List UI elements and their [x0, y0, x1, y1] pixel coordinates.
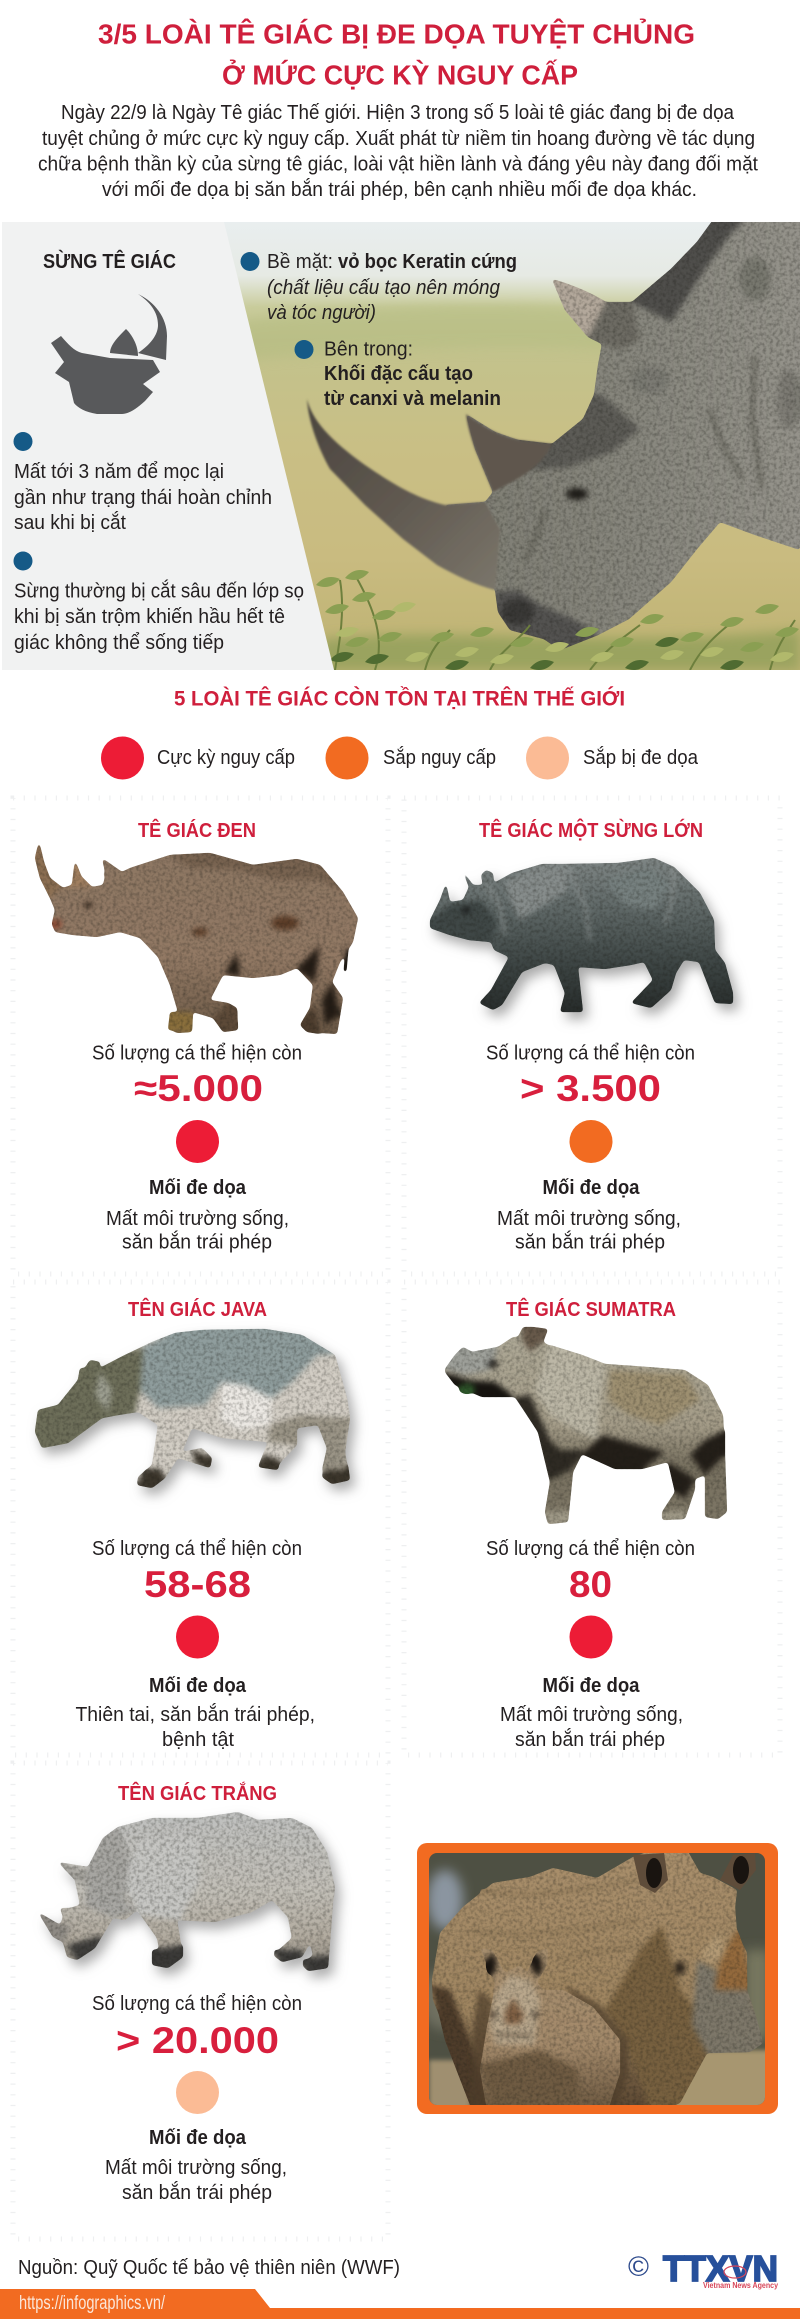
- intro text: chữa bệnh thần kỳ của sừng tê giác, loài vật hiền lành và đáng yêu này đang đối mặt: [38, 154, 758, 176]
- logo: TTXVN: Vietnam News Agency: [703, 2281, 778, 2290]
- intro text: [38, 102, 758, 201]
- card: black rhino: săn bắn trái phép: [122, 1230, 272, 1254]
- card: black rhino: TÊ GIÁC ĐEN: [138, 818, 256, 842]
- card: Javan rhino: TÊN GIÁC JAVA: [128, 1297, 267, 1321]
- intro text: tuyệt chủng ở mức cực kỳ nguy cấp. Xuất phát từ niềm tin hoang đường về tác dụng: [42, 128, 755, 150]
- card: black rhino: Số lượng cá thể hiện còn: [92, 1042, 302, 1064]
- card: Sumatran rhino: TÊ GIÁC SUMATRA: [506, 1297, 676, 1321]
- bullet: surface: và tóc người): [267, 302, 376, 324]
- footer bar: [0, 2289, 800, 2319]
- card: Javan rhino: Mối đe dọa: [149, 1675, 247, 1697]
- bullet: surface: Bề mặt:: [267, 251, 333, 273]
- card: greater one-horned rhino: TÊ GIÁC MỘT SỪNG LỚN: [479, 818, 703, 842]
- bullet: surface: [240, 251, 517, 324]
- card: greater one-horned rhino: [430, 818, 733, 1254]
- sidebar heading: SỪNG TÊ GIÁC: [43, 249, 176, 273]
- image: mother's ears: [633, 1853, 756, 1893]
- bullet: interior: từ canxi và melanin: [324, 388, 501, 410]
- image: calf: [480, 1948, 620, 2110]
- source: Nguồn: Quỹ Quốc tế bảo vệ thiên niên (WWF): [18, 2257, 400, 2279]
- title: Ở MỨC CỰC KỲ NGUY CẤP: [222, 58, 578, 90]
- card: white rhino: Mối đe dọa: [149, 2127, 247, 2149]
- legend: Sắp nguy cấp: [383, 746, 496, 769]
- title: [98, 18, 695, 90]
- image: greater one-horned rhino: [430, 858, 733, 1012]
- card: white rhino: > 20.000: [116, 2020, 279, 2061]
- intro text: Ngày 22/9 là Ngày Tê giác Thế giới. Hiện 3 trong số 5 loài tê giác đang bị đe dọa: [61, 102, 735, 124]
- title: 3/5 LOÀI TÊ GIÁC BỊ ĐE DỌA TUYỆT CHỦNG: [98, 18, 695, 50]
- card: Sumatran rhino: săn bắn trái phép: [515, 1728, 665, 1751]
- image: calf shadow: [470, 1985, 628, 2110]
- photo: low grass band: [320, 630, 800, 670]
- card: Javan rhino: Thiên tai, săn bắn trái phép,: [76, 1703, 315, 1726]
- card: Sumatran rhino: [445, 1297, 727, 1751]
- card: black rhino: [35, 818, 358, 1254]
- photo: foliage: [316, 570, 799, 670]
- photo: distant tree line: [248, 302, 600, 353]
- bullet: interior: Bên trong:: [324, 338, 413, 360]
- card: white rhino: [38, 1781, 335, 2204]
- card: white rhino: săn bắn trái phép: [122, 2181, 272, 2204]
- card: Sumatran rhino: Mối đe dọa: [542, 1675, 640, 1697]
- card: greater one-horned rhino: săn bắn trái phép: [515, 1230, 665, 1254]
- footer bar: https://infographics.vn/: [19, 2293, 166, 2314]
- image: Javan rhino: [35, 1329, 350, 1488]
- legend: Cực kỳ nguy cấp: [157, 747, 295, 769]
- icon: rhino head silhouette: [51, 294, 167, 414]
- legend: [101, 736, 699, 780]
- card: Javan rhino: [35, 1297, 350, 1751]
- bullet: poaching: khi bị săn trộm khiến hầu hết tê: [14, 606, 285, 628]
- intro text: với mối đe dọa bị săn bắn trái phép, bên cạnh nhiều mối đe dọa khác.: [102, 178, 697, 201]
- bullet: poaching: [14, 552, 304, 654]
- section heading: 5 LOÀI TÊ GIÁC CÒN TỒN TẠI TRÊN THẾ GIỚI: [174, 686, 625, 710]
- card: black rhino: Mối đe dọa: [149, 1177, 247, 1199]
- card: Javan rhino: 58-68: [144, 1564, 251, 1605]
- photo frame: mother and calf: [417, 1843, 778, 2114]
- card: Sumatran rhino: 80: [569, 1564, 612, 1605]
- panel: grey sidebar: [2, 222, 334, 670]
- bullet: surface: (chất liệu cấu tạo nên móng: [267, 277, 500, 299]
- card: Javan rhino: bệnh tật: [162, 1729, 234, 1751]
- image: black rhino: [35, 841, 358, 1034]
- legend: Sắp bị đe dọa: [583, 746, 699, 769]
- card: greater one-horned rhino: Mất môi trường sống,: [497, 1208, 681, 1230]
- image: Sumatran rhino: [445, 1327, 727, 1524]
- bullet: regrowth: [14, 432, 272, 534]
- card: white rhino: Số lượng cá thể hiện còn: [92, 1993, 302, 2015]
- card: black rhino: Mất môi trường sống,: [106, 1208, 289, 1230]
- photo: rhino head: [445, 220, 800, 650]
- card: Sumatran rhino: Số lượng cá thể hiện còn: [486, 1538, 695, 1560]
- logo: TTXVN: ©: [628, 2251, 649, 2282]
- bullet: interior: [294, 338, 501, 410]
- bullet: interior: Khối đặc cấu tạo: [324, 363, 473, 385]
- card: greater one-horned rhino: > 3.500: [520, 1068, 661, 1109]
- bullet: poaching: Sừng thường bị cắt sâu đến lớp sọ: [14, 580, 304, 602]
- photo: small horn: [466, 414, 552, 492]
- bullet: surface: vỏ bọc Keratin cứng: [338, 251, 517, 273]
- bullet: regrowth: Mất tới 3 năm để mọc lại: [14, 461, 224, 483]
- card: white rhino: Mất môi trường sống,: [105, 2157, 287, 2179]
- card: greater one-horned rhino: Số lượng cá thể hiện còn: [486, 1042, 695, 1064]
- card: Javan rhino: Số lượng cá thể hiện còn: [92, 1538, 302, 1560]
- image: mother rhino: [432, 1850, 763, 2110]
- bullet: regrowth: gần như trạng thái hoàn chỉnh: [14, 487, 272, 509]
- card: greater one-horned rhino: Mối đe dọa: [542, 1177, 640, 1199]
- logo: TTXVN: TTXVN: [663, 2248, 778, 2289]
- photo: main horn: [307, 399, 500, 590]
- panel: rhino horn photo: [0, 220, 800, 670]
- bullet: regrowth: sau khi bị cắt: [14, 511, 126, 534]
- card: white rhino: TÊN GIÁC TRẮNG: [118, 1781, 277, 1805]
- image: white rhino: [38, 1812, 335, 1971]
- bullet: poaching: giác không thể sống tiếp: [14, 632, 224, 654]
- card: Sumatran rhino: Mất môi trường sống,: [500, 1704, 683, 1726]
- card: black rhino: ≈5.000: [134, 1068, 263, 1109]
